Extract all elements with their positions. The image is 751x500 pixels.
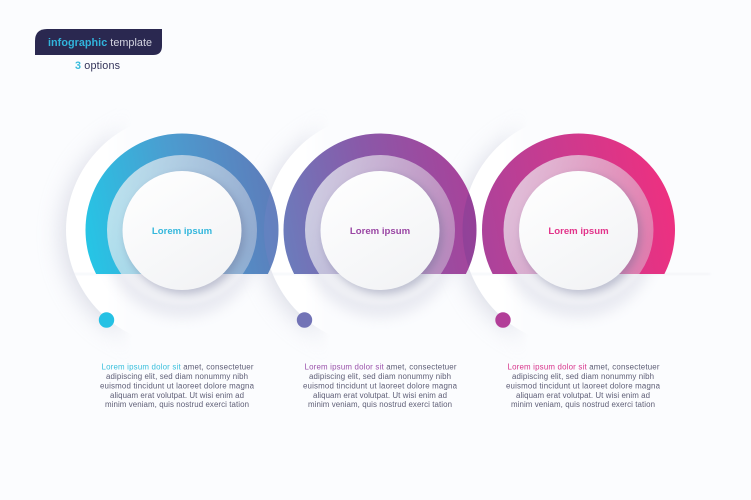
floor shadow [70, 273, 710, 275]
text block 2: minim veniam, quis nostrud exerci tation [308, 400, 452, 409]
dot 3 [495, 312, 511, 328]
panel: option 1 [86, 134, 278, 328]
subtitle: 3 options [75, 60, 121, 72]
text block 1: aliquam erat volutpat. Ut wisi enim ad [110, 391, 244, 400]
text block 3: aliquam erat volutpat. Ut wisi enim ad [516, 391, 650, 400]
label 3: Lorem ipsum [548, 226, 609, 237]
halo arc 3 [458, 136, 517, 332]
inner circle shadow 1 [125, 174, 245, 294]
text block 1: euismod tincidunt ut laoreet dolore magna [100, 382, 255, 390]
lower ring shadow 1 [112, 274, 251, 318]
dot 1 [99, 312, 114, 328]
outer ring 3 [482, 134, 675, 274]
outer ring 2 [284, 134, 476, 274]
text block 2: euismod tincidunt ut laoreet dolore magna [303, 382, 458, 390]
middle ring 1 [107, 155, 257, 274]
panel: option 3 [462, 134, 675, 328]
text block 3: minim veniam, quis nostrud exerci tation [511, 400, 655, 409]
text block 2: Lorem ipsum dolor sit amet, consectetuer [304, 362, 457, 372]
text block 3: euismod tincidunt ut laoreet dolore magna [506, 382, 661, 390]
label 1: Lorem ipsum [152, 226, 212, 237]
dot 2 [297, 312, 312, 328]
text block 3: adipiscing elit, sed diam nonummy nibh [512, 372, 654, 381]
title badge [35, 29, 162, 55]
inner circle 3 [519, 171, 638, 290]
text block 2: adipiscing elit, sed diam nonummy nibh [309, 372, 451, 381]
label 2: Lorem ipsum [350, 226, 410, 237]
halo arc 1 [54, 136, 120, 332]
text block 2 [303, 362, 458, 409]
overlap tint 1-2 [264, 192, 278, 268]
text block 1: adipiscing elit, sed diam nonummy nibh [106, 372, 248, 381]
text block 3 [506, 362, 661, 409]
outer ring 1 [86, 134, 278, 274]
inner circle shadow 2 [323, 174, 443, 294]
inner circle shadow 3 [522, 174, 642, 294]
inner circle 1 [122, 171, 242, 290]
panel: option 2 [264, 134, 476, 328]
halo arc 2 [260, 136, 318, 332]
text block 1: Lorem ipsum dolor sit amet, consectetuer [102, 362, 254, 372]
text block 1 [100, 362, 255, 409]
lower ring shadow 3 [508, 274, 648, 318]
overlap tint 2-3 [462, 192, 476, 268]
text block 1: minim veniam, quis nostrud exerci tation [105, 400, 249, 409]
middle ring 2 [305, 155, 455, 274]
lower ring shadow 2 [310, 274, 449, 318]
middle ring 3 [504, 155, 654, 274]
text block 3: Lorem ipsum dolor sit amet, consectetuer [508, 362, 660, 372]
inner circle 2 [320, 171, 440, 290]
title badge: infographic template [48, 37, 152, 49]
text block 2: aliquam erat volutpat. Ut wisi enim ad [313, 391, 447, 400]
